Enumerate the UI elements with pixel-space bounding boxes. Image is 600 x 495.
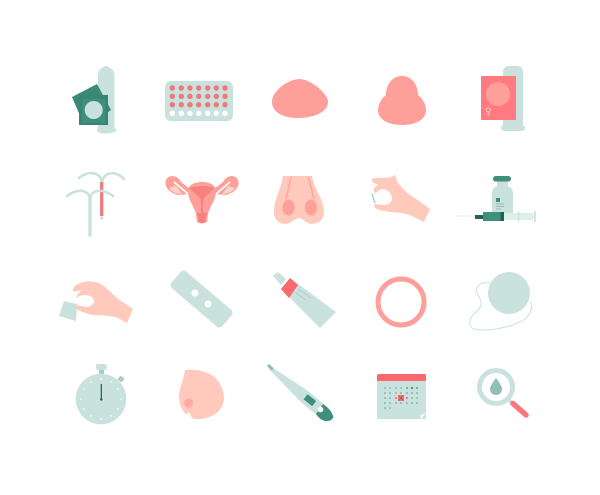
icon: injection vial and syringe	[457, 176, 536, 222]
icon: condom and wrapper	[72, 66, 116, 134]
icon: stopwatch	[76, 364, 126, 424]
icon: uterus	[165, 176, 239, 224]
icon: nose	[274, 176, 324, 224]
icon: female condom packet and sleeve	[481, 66, 525, 131]
icon: vaginal ring	[378, 279, 424, 325]
icon: contraceptive sponge with cord	[470, 272, 531, 330]
icon: calendar	[377, 374, 426, 419]
icon: diaphragm blob	[272, 79, 328, 118]
icon: test strip	[169, 269, 234, 329]
icon: breast	[179, 370, 224, 419]
icon: hand holding pill	[372, 175, 430, 222]
icon: magnifier with drop	[480, 370, 526, 415]
icon: thermometer	[267, 364, 334, 421]
icon: hand holding patch	[59, 281, 133, 323]
icon: cervical cap blob	[378, 76, 426, 125]
icon: IUD devices	[67, 173, 124, 235]
icon: contraceptive pill pack	[165, 81, 233, 121]
icon: cream tube	[273, 272, 336, 328]
